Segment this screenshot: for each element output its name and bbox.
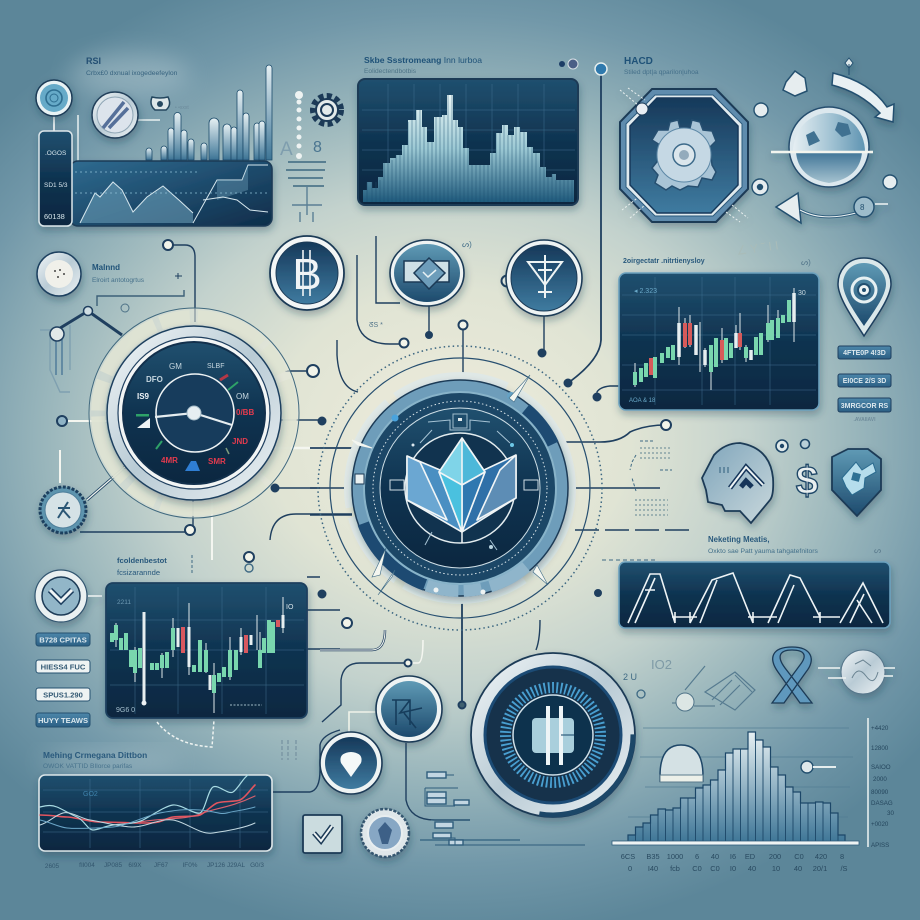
panel: candlestick right [619, 273, 819, 410]
icon: gear small [313, 96, 341, 124]
heading: bottom left candle chart [117, 555, 253, 577]
multi-line axis labels [45, 862, 264, 870]
histogram x axis labels [621, 852, 848, 873]
buttons right: 3MRGCOR RS [841, 403, 889, 410]
multi-line axis labels: JP085 [104, 862, 123, 869]
gauge labels: JND [232, 437, 248, 446]
panel: RSI chart: .OGOS [45, 150, 67, 157]
panel: peak chart [619, 562, 890, 628]
icon: dollar: $ [796, 459, 818, 503]
histogram x axis labels: B35 [646, 852, 660, 861]
gauge labels: GM [169, 362, 182, 371]
icon: envelope coin [390, 240, 464, 306]
misc label: ᘔS * [369, 321, 383, 329]
panel: RSI chart [39, 131, 272, 226]
panel: RSI chart: SD1 5/3 [44, 182, 68, 189]
buttons left: B728 CPITAS [39, 636, 87, 644]
heading: MACD: HACD [624, 56, 653, 67]
histogram x axis labels: 8 [840, 852, 844, 861]
heading: multi-line chart [40, 750, 180, 772]
icon: diamond tag [783, 71, 807, 96]
heading: candle chart right: 2oirgectatr .nitrtienysloy [623, 258, 705, 265]
icon: drop coin [320, 732, 382, 794]
gauge labels: SLBF [207, 363, 225, 370]
heading: bottom left candle chart: fcsizarannde [117, 568, 160, 577]
icon: map pin [838, 258, 891, 336]
icon: check square [303, 815, 342, 853]
histogram x axis labels: 6CS [621, 852, 635, 861]
heading: histogram chart: Skbe Ssstromeang Inn lurboa [364, 55, 482, 65]
histogram x axis labels: 200 [769, 852, 781, 861]
histogram x axis labels: 0 [628, 864, 632, 873]
histogram y axis labels [871, 725, 894, 849]
panel: candlestick right: 30 [798, 290, 806, 297]
histogram x axis labels: 40 [711, 852, 719, 861]
icon: hex shield [832, 449, 881, 516]
panel: RSI bars [146, 65, 272, 160]
gauge labels: OM [236, 392, 249, 401]
chart: histogram bottom right [612, 718, 894, 873]
central emblem [318, 346, 602, 630]
icon: curved arrow [832, 58, 894, 122]
marks center-left [282, 740, 296, 760]
icon: target button [36, 80, 72, 116]
small marks: ∠ Y ˜ I I [735, 238, 779, 258]
histogram y axis labels: 80090 [871, 789, 889, 796]
gauge heading: Malnnd [92, 263, 120, 272]
heading: MACD [624, 56, 699, 76]
gauge labels: DFO [146, 375, 163, 384]
icon: silver badge [818, 650, 895, 694]
connector lines [40, 75, 690, 840]
icon: bitcoin coin: B [292, 250, 322, 299]
histogram x axis labels: ED [745, 852, 755, 861]
icon: left arrow with node: 8 [860, 203, 865, 212]
icon: left arrow with node [776, 193, 888, 223]
buttons left: SPUS1.290 [43, 690, 83, 700]
multi-line axis labels: JP126 [207, 862, 226, 869]
top right icons of lower band [623, 657, 755, 711]
dotted scale: A [280, 139, 293, 160]
histogram x axis labels: I40 [648, 864, 658, 873]
icon: silver coin [92, 92, 138, 138]
logo: crystal [407, 438, 516, 532]
panel: RSI chart: 60138 [44, 212, 65, 221]
dashed tech marks right [635, 448, 672, 515]
histogram y axis labels: +4420 [871, 725, 889, 732]
histogram x axis labels: 40 [748, 864, 756, 873]
heading: MACD: Stiled dpt|a qparilon|uhoa [624, 69, 699, 76]
multi-line axis labels: 6I9X [128, 862, 142, 869]
heading: histogram chart: Eolidectendbotbis [364, 68, 417, 75]
heading: RSI: Crbx£0 dxnual ixogedeefeylon [86, 70, 178, 77]
gauge [89, 308, 299, 518]
histogram y axis labels: 30 [887, 810, 894, 817]
panel: candlestick left: IO [286, 604, 294, 611]
dotted scale: 8 [313, 139, 322, 156]
histogram x axis labels: C0 [794, 852, 804, 861]
dotted scale [280, 91, 322, 160]
icon: ribbon [772, 647, 812, 703]
heading: bottom right panel: Neketing Meatis, [708, 535, 770, 544]
heading: bottom right panel [708, 535, 881, 555]
histogram x axis labels: C0 [692, 864, 702, 873]
panel: multi-line chart [39, 775, 272, 851]
multi-line axis labels: 2605 [45, 863, 60, 870]
histogram x axis labels: /S [841, 864, 848, 873]
panel: candlestick left [106, 583, 307, 718]
icon: rune coin [376, 676, 442, 742]
histogram y axis labels: +0020 [871, 821, 889, 828]
heading: bottom right panel: Oxkto sae Patt yauma tahgatefnitors [708, 548, 819, 555]
buttons left: HUYY TEAWS [38, 716, 88, 725]
small marks [462, 238, 779, 258]
heading: multi-line chart: Mehing Crmegana Dittbon [43, 750, 147, 760]
panel: candlestick right: AOA & 18 [629, 398, 656, 404]
histogram y axis labels: DASAG [871, 800, 893, 807]
heading: candle chart right [623, 258, 811, 267]
heading: bottom left candle chart: fcoldenbestot [117, 556, 167, 565]
gauge heading: Elroirt antotogrtus [92, 277, 145, 284]
icon: gear coin [361, 809, 409, 857]
panel: histogram chart [358, 79, 578, 205]
node: top line dot [595, 63, 607, 75]
small connector nodes [57, 240, 671, 708]
heading: RSI [70, 53, 190, 97]
gauge labels: IS9 [137, 392, 150, 401]
gauge labels [137, 362, 254, 466]
heading: bottom right panel: ᔕ [874, 546, 881, 555]
heading: histogram chart [364, 55, 578, 75]
gauge labels: SMR [208, 457, 226, 466]
panel: candlestick left: 2211 [117, 599, 131, 606]
top right icons of lower band: 2 U [623, 672, 637, 682]
multi-line axis labels: JF67 [154, 862, 169, 869]
icon: octagon gear [620, 88, 748, 222]
icon: triangle coin [506, 240, 582, 316]
histogram x axis labels: 10 [772, 864, 780, 873]
histogram y axis labels: 12800 [871, 745, 889, 752]
histogram x axis labels: 6 [695, 852, 699, 861]
multi-line axis labels: G0/3 [250, 862, 264, 869]
histogram x axis labels: 20/1 [813, 864, 827, 873]
histogram y axis labels: APISS [871, 842, 889, 849]
histogram x axis labels: I6 [730, 852, 736, 861]
histogram x axis labels: fcb [670, 864, 680, 873]
histogram y axis labels: SAIOO [871, 764, 891, 771]
histogram x axis labels: C0 [710, 864, 720, 873]
buttons right: .AVAIIAVI [854, 417, 876, 423]
icon: hinge joint [50, 306, 92, 341]
multi-line axis labels: J29AL [227, 862, 246, 869]
icon: small mask [151, 97, 189, 111]
panel: candlestick left: 9G6 0 [116, 707, 135, 714]
heading: RSI: RSI [86, 56, 101, 66]
buttons left [36, 633, 90, 727]
heading: candle chart right: ᔕ) [801, 258, 811, 267]
icon: dots pair [776, 440, 810, 452]
histogram x axis labels: 1000 [667, 852, 683, 861]
buttons left: HIESS4 FUC [41, 662, 86, 672]
gauge labels: 0/BB [236, 408, 254, 417]
histogram y axis labels: 2000 [873, 776, 887, 783]
buttons right: EI0CE 2/S 3D [843, 378, 886, 385]
icon: globe [771, 107, 873, 187]
top right icons of lower band: IO2 [651, 657, 672, 672]
dashed link [157, 720, 214, 747]
multi-line axis labels: IF0% [183, 862, 198, 869]
icon: speech bubble [702, 443, 773, 523]
icon: check chevron circle [35, 570, 102, 622]
small marks: ᔕ) [462, 240, 472, 249]
icon: gear coin lower left [40, 487, 86, 533]
buttons right [838, 346, 891, 423]
multi-line axis labels: fIl004 [79, 862, 95, 869]
heading: multi-line chart: OWOK VATTID BIlorce parifas [43, 763, 133, 770]
gauge labels: 4MR [161, 456, 178, 465]
small right marks near emblem [600, 441, 672, 560]
histogram x axis labels: I0 [730, 864, 736, 873]
decision tree [425, 772, 585, 845]
histogram x axis labels: 420 [815, 852, 827, 861]
icon: bitcoin coin [270, 236, 344, 310]
gauge heading [37, 252, 182, 312]
histogram x axis labels: 40 [794, 864, 802, 873]
panel: multi-line chart: GO2 [83, 791, 98, 798]
buttons right: 4FTE0P 4!3D [843, 350, 886, 357]
big coin [471, 653, 635, 817]
icon: small mask: • •xxxt [175, 105, 189, 111]
icon: small dial [752, 103, 897, 195]
panel: candlestick right: ◂ 2.323 [634, 288, 657, 295]
